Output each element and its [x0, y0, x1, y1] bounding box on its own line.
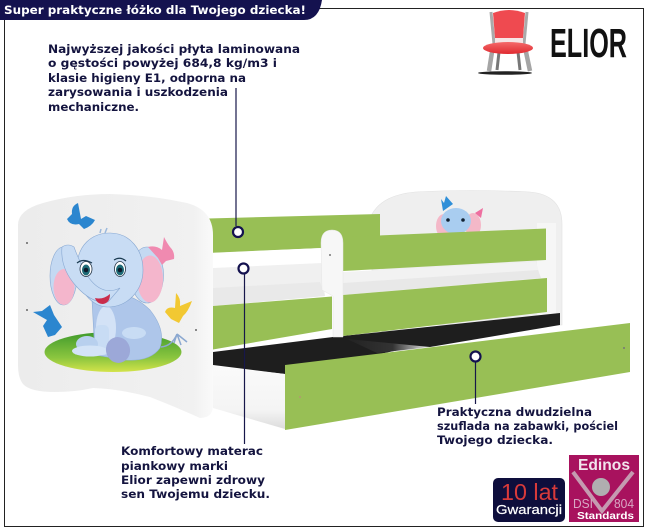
- text block: board quality: o gęstości powyżej 684,8 kg/m3 i: [48, 56, 277, 70]
- text block: board quality: klasie higieny E1, odporna na: [48, 71, 246, 85]
- text block: drawer: Twojego dziecka.: [437, 433, 553, 447]
- logo: Elior: [478, 10, 627, 75]
- butterfly: top blue: [67, 203, 95, 229]
- text block: mattress: piankowy marki: [121, 459, 228, 473]
- left end panel: [18, 194, 213, 418]
- white gap behind mattress: [213, 248, 322, 269]
- badge: 10 year warranty: 10 lat: [501, 479, 559, 505]
- drawer side: [213, 366, 285, 429]
- title banner: Super praktyczne łóżko dla Twojego dziecka!: [4, 3, 306, 17]
- small elephant print: [436, 196, 483, 238]
- butterfly: yellow: [165, 293, 192, 323]
- grass: [44, 332, 182, 372]
- text block: board quality: Najwyższej jakości płyta laminowana: [48, 42, 300, 56]
- text block: board quality: mechaniczne.: [48, 100, 139, 114]
- text block: drawer: [437, 405, 618, 447]
- badge: 10 year warranty: Gwarancji: [496, 502, 562, 517]
- drawer front: green: [285, 323, 630, 430]
- panel screws: [26, 242, 197, 331]
- text block: mattress: sen Twojemu dziecku.: [121, 487, 270, 501]
- butterfly: pink: [148, 237, 174, 265]
- drawer highlight: [347, 339, 430, 353]
- screws on rail and drawer: [299, 254, 625, 398]
- text block: mattress: [121, 444, 270, 501]
- badge: Edinos standards: 804: [614, 496, 634, 511]
- upper safety rail: green: [343, 228, 546, 271]
- icon: red chair: [478, 10, 533, 75]
- bed illustration: [18, 190, 630, 430]
- lower bed rail: left: [213, 296, 332, 350]
- callout marker: mattress: [238, 264, 248, 444]
- text block: drawer: Praktyczna dwudzielna: [437, 405, 592, 419]
- text block: drawer: szuflada na zabawki, pościel: [437, 419, 618, 433]
- badge: Edinos standards: Edinos: [578, 457, 630, 474]
- back panel: green: [208, 214, 380, 253]
- butterfly: left blue: [33, 305, 62, 337]
- callout marker: drawer: [470, 352, 480, 404]
- badge: 10 year warranty: [493, 478, 565, 522]
- base under bed: [213, 313, 560, 374]
- text block: board quality: [48, 42, 300, 114]
- headboard: [372, 190, 562, 325]
- badge: Edinos standards: DSI: [573, 496, 593, 511]
- title banner: [0, 0, 322, 20]
- text block: board quality: zarysowania i uszkodzenia: [48, 85, 228, 99]
- elephant: [50, 228, 187, 366]
- callout marker: back panel: [233, 88, 243, 237]
- text block: mattress: Elior zapewni zdrowy: [121, 473, 266, 487]
- mattress: [213, 262, 541, 306]
- badge: Edinos standards: Standards: [577, 511, 635, 522]
- lower bed rail: right: [343, 278, 547, 336]
- text block: mattress: Komfortowy materac: [121, 444, 263, 458]
- rail post: [321, 230, 343, 337]
- badge: Edinos standards: [569, 455, 639, 522]
